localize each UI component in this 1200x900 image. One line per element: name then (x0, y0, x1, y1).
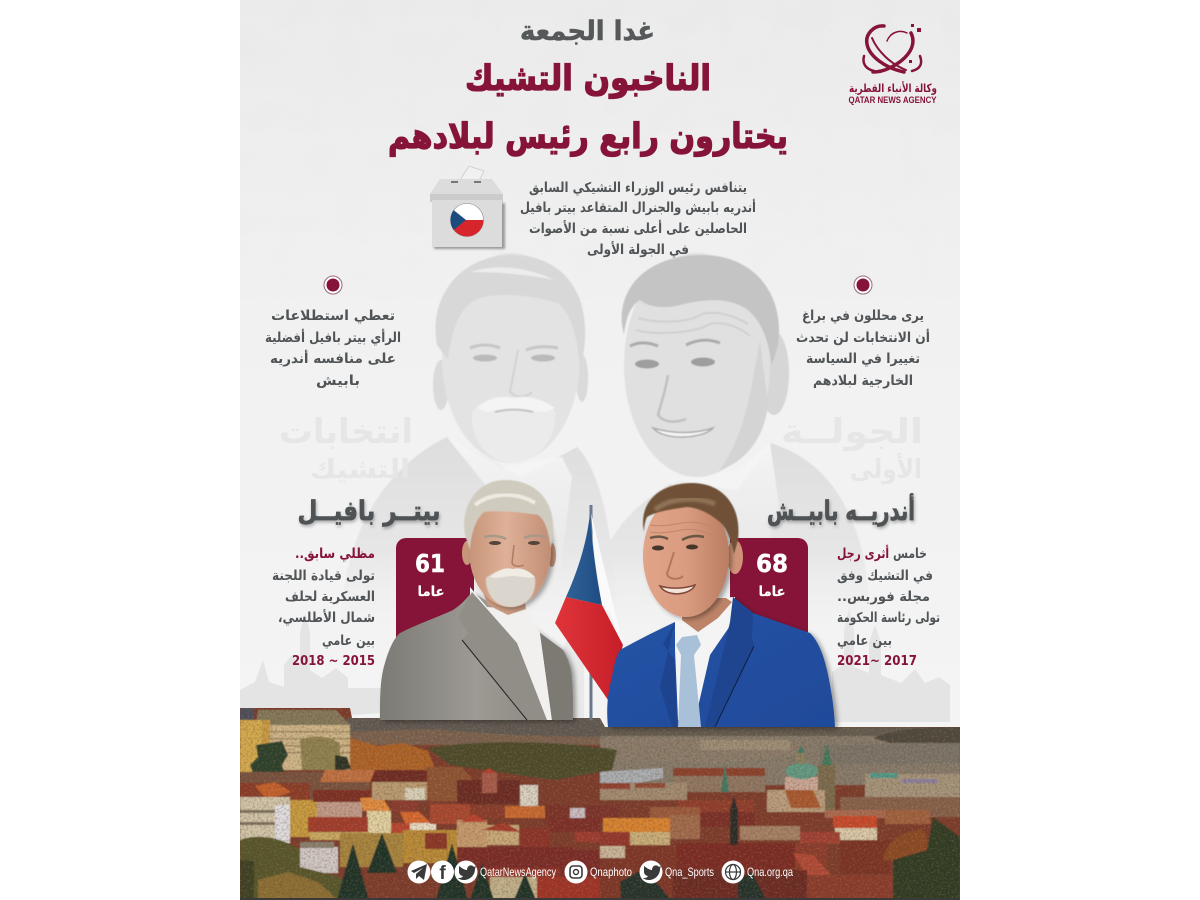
logo english name: QATAR NEWS AGENCY (848, 95, 936, 105)
logo arabic name: وكالة الأنباء القطرية (849, 81, 937, 96)
ghost wrinkles (636, 313, 750, 336)
note text: على منافسه أندريه (270, 350, 396, 367)
note text: أن الانتخابات لن تحدث (796, 329, 930, 346)
portrait: Peter Pavel (380, 480, 573, 720)
bio text top (837, 545, 940, 649)
age box: Pavel 61 (396, 538, 474, 640)
right quarter buildings (600, 796, 930, 900)
intro paragraph: في الجولة الأولى (587, 241, 689, 258)
bio text top: خامس أثرى رجل (837, 545, 927, 562)
note text: الرأي بيتر بافيل أفضلية (265, 329, 401, 346)
intro paragraph: أندريه بابيش والجنرال المتقاعد بيتر بافيل (520, 199, 756, 216)
ghost head (624, 253, 770, 477)
shirt (675, 597, 735, 720)
icon: instagram (564, 860, 588, 884)
ear (727, 540, 743, 574)
bio: Babis (837, 545, 940, 669)
head (643, 495, 729, 617)
head (469, 493, 551, 607)
title line 2: يختارون رابع رئيس لبلادهم (388, 117, 788, 157)
handle: QatarNewsAgency: QatarNewsAgency (480, 865, 556, 879)
ghost head (442, 253, 580, 463)
note text: بابيش (316, 373, 360, 389)
right lapel (540, 633, 573, 720)
logo mark (863, 26, 921, 72)
hair (464, 480, 553, 550)
conifers and foliage (240, 817, 960, 900)
logo: Qatar News Agency (848, 24, 937, 105)
icon: twitter sports (640, 860, 662, 884)
left lapel (458, 592, 547, 720)
distant right buildings (600, 768, 960, 817)
intro paragraph: يتنافس رئيس الوزراء التشيكي السابق (529, 180, 747, 196)
icon: telegram (408, 860, 430, 884)
name: Andrej Babis: أندريــه بابيــش (767, 493, 915, 527)
tie (676, 635, 701, 727)
central quarter buildings (300, 768, 620, 900)
bio text: تولى قيادة اللجنة (272, 568, 375, 584)
portrait: Andrej Babis (607, 483, 835, 727)
bio text top: بين عامي (837, 633, 892, 649)
ears (462, 541, 556, 567)
note text: الخارجية لبلادهم (813, 373, 913, 389)
note text (265, 308, 401, 389)
note text: تعطي استطلاعات (271, 308, 395, 324)
age box: Babis 68: عاما (758, 584, 786, 600)
bio text top: تولى رئاسة الحكومة (837, 610, 940, 626)
social media bar (408, 860, 793, 884)
ghost jacket (340, 437, 617, 640)
date heading: غدا الجمعة (520, 16, 655, 47)
ghost ear (759, 331, 789, 415)
note text: يرى محللون في براغ (802, 308, 924, 324)
icon: ballot box (430, 166, 505, 249)
ghost text: elections watermark left: انتخابات (279, 412, 413, 452)
bio text: شمال الأطلسي، (278, 609, 375, 626)
castle (240, 708, 350, 774)
left lapel (660, 622, 677, 727)
smile (660, 585, 695, 594)
castle garden trees (300, 737, 340, 770)
flag of Czech Republic (555, 505, 623, 720)
bio text top: في التشيك وفق (837, 568, 933, 584)
handle: Qnaphoto: Qnaphoto (590, 865, 632, 879)
river (600, 768, 663, 784)
age box: Babis 68: 68 (756, 549, 788, 578)
title block (388, 16, 788, 157)
jacket (380, 592, 573, 720)
bio years: 2018 ~ 2015 (292, 653, 375, 669)
age box: Pavel 61: 61 (415, 549, 445, 578)
ghost text: first round watermark right (781, 412, 923, 485)
ghost features (470, 345, 558, 350)
icon: facebook: f (439, 863, 446, 884)
background skyline silhouette (240, 608, 950, 722)
icon: globe (722, 860, 744, 884)
age box: Babis 68 (730, 538, 808, 632)
bio text (272, 568, 375, 649)
note: Pavel polls (265, 276, 401, 389)
shirt (470, 587, 552, 720)
handle: website: Qna.org.qa (747, 865, 793, 879)
bio highlight: مظلي سابق.. (295, 546, 375, 562)
background panel (240, 0, 960, 900)
ghost hair (622, 255, 779, 365)
bio text: بين عامي (322, 633, 375, 649)
beard (486, 569, 535, 607)
mid base (236, 704, 964, 900)
ghost ears (433, 354, 588, 410)
ghost portrait: Babis (585, 253, 870, 640)
photo texture (240, 708, 960, 900)
ghost text: elections watermark left (279, 412, 413, 485)
note: Prague analysts (796, 276, 930, 389)
hair (643, 483, 739, 554)
eyes and brows (650, 536, 704, 550)
title line 1: الناخبون التشيك (465, 59, 711, 99)
photo: Prague cityscape (236, 704, 964, 900)
ghost text: elections watermark left: التشيك (310, 455, 410, 485)
bio text: العسكرية لحلف (285, 589, 375, 605)
neck (682, 598, 732, 632)
ghost jacket (585, 443, 870, 640)
ghost features (630, 340, 720, 346)
intro paragraph (520, 180, 756, 258)
forehead wrinkles (650, 522, 716, 536)
czech flag badge (446, 204, 484, 237)
domed church (721, 743, 835, 816)
name: Peter Pavel: بيتــر بافيــل (298, 496, 440, 527)
eyes and brows (484, 536, 546, 566)
ghost beard (472, 397, 555, 463)
icon: facebook (431, 860, 454, 884)
distant city (347, 718, 960, 785)
right lapel (705, 597, 754, 727)
note text: تغييرا في السياسة (806, 351, 920, 367)
moustache (490, 568, 535, 578)
nose (667, 552, 683, 579)
bullet marker (854, 276, 872, 294)
bio years: 2021~ 2017 (837, 653, 917, 669)
neck (480, 585, 526, 615)
age box: Pavel 61: عاما (418, 584, 444, 600)
handle: Qna_Sports: Qna_Sports (665, 865, 714, 879)
jacket (607, 597, 835, 727)
bottom edge (240, 898, 960, 900)
note text (796, 308, 930, 389)
ghost text: first round watermark right: الأولى (850, 453, 922, 485)
foreground terrain band (240, 772, 370, 800)
bullet marker (324, 276, 342, 294)
left quarter buildings (240, 770, 436, 843)
ghost portrait: Pavel (340, 253, 617, 640)
ghost text: first round watermark right: الجولــة (781, 412, 923, 452)
wooded hill (427, 742, 617, 780)
icon: twitter (454, 860, 478, 884)
bio text top: مجلة فوربس.. (837, 589, 930, 605)
intro paragraph: الحاصلين على أعلى نسبة من الأصوات (529, 220, 747, 237)
bio: Pavel (272, 546, 375, 669)
autumn trees (350, 738, 434, 770)
ghost hair (436, 255, 585, 368)
